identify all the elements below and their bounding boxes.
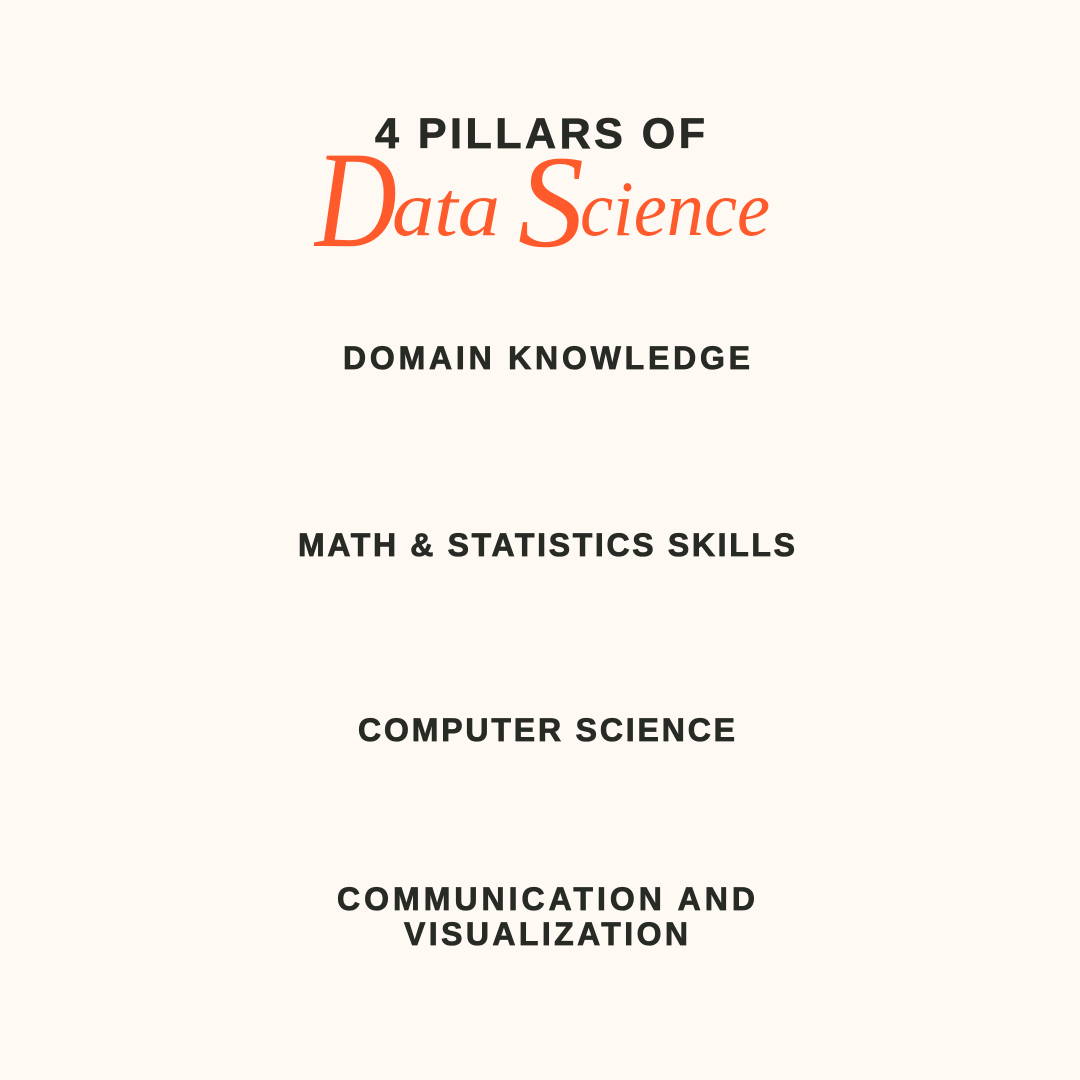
pillar: communication and visualization: VISUALIZATION xyxy=(404,916,688,952)
pillar: communication and visualization: COMMUNICATION AND xyxy=(337,881,755,917)
title script: Data Science xyxy=(313,123,770,276)
title line: 4 Pillars of: 4 PILLARS OF xyxy=(375,110,705,158)
pillar: computer science: COMPUTER SCIENCE xyxy=(358,712,735,748)
pillar: math and statistics skills: MATH & STATISTICS SKILLS xyxy=(298,527,795,563)
pillar: domain knowledge: DOMAIN KNOWLEDGE xyxy=(343,340,750,376)
title script: Data Science: S xyxy=(518,128,584,275)
pillar: communication and visualization xyxy=(337,881,755,952)
title script: Data Science: cience xyxy=(580,165,770,252)
title script: Data Science: ata xyxy=(392,165,500,252)
title xyxy=(313,110,770,276)
title script: Data Science: D xyxy=(313,123,397,276)
